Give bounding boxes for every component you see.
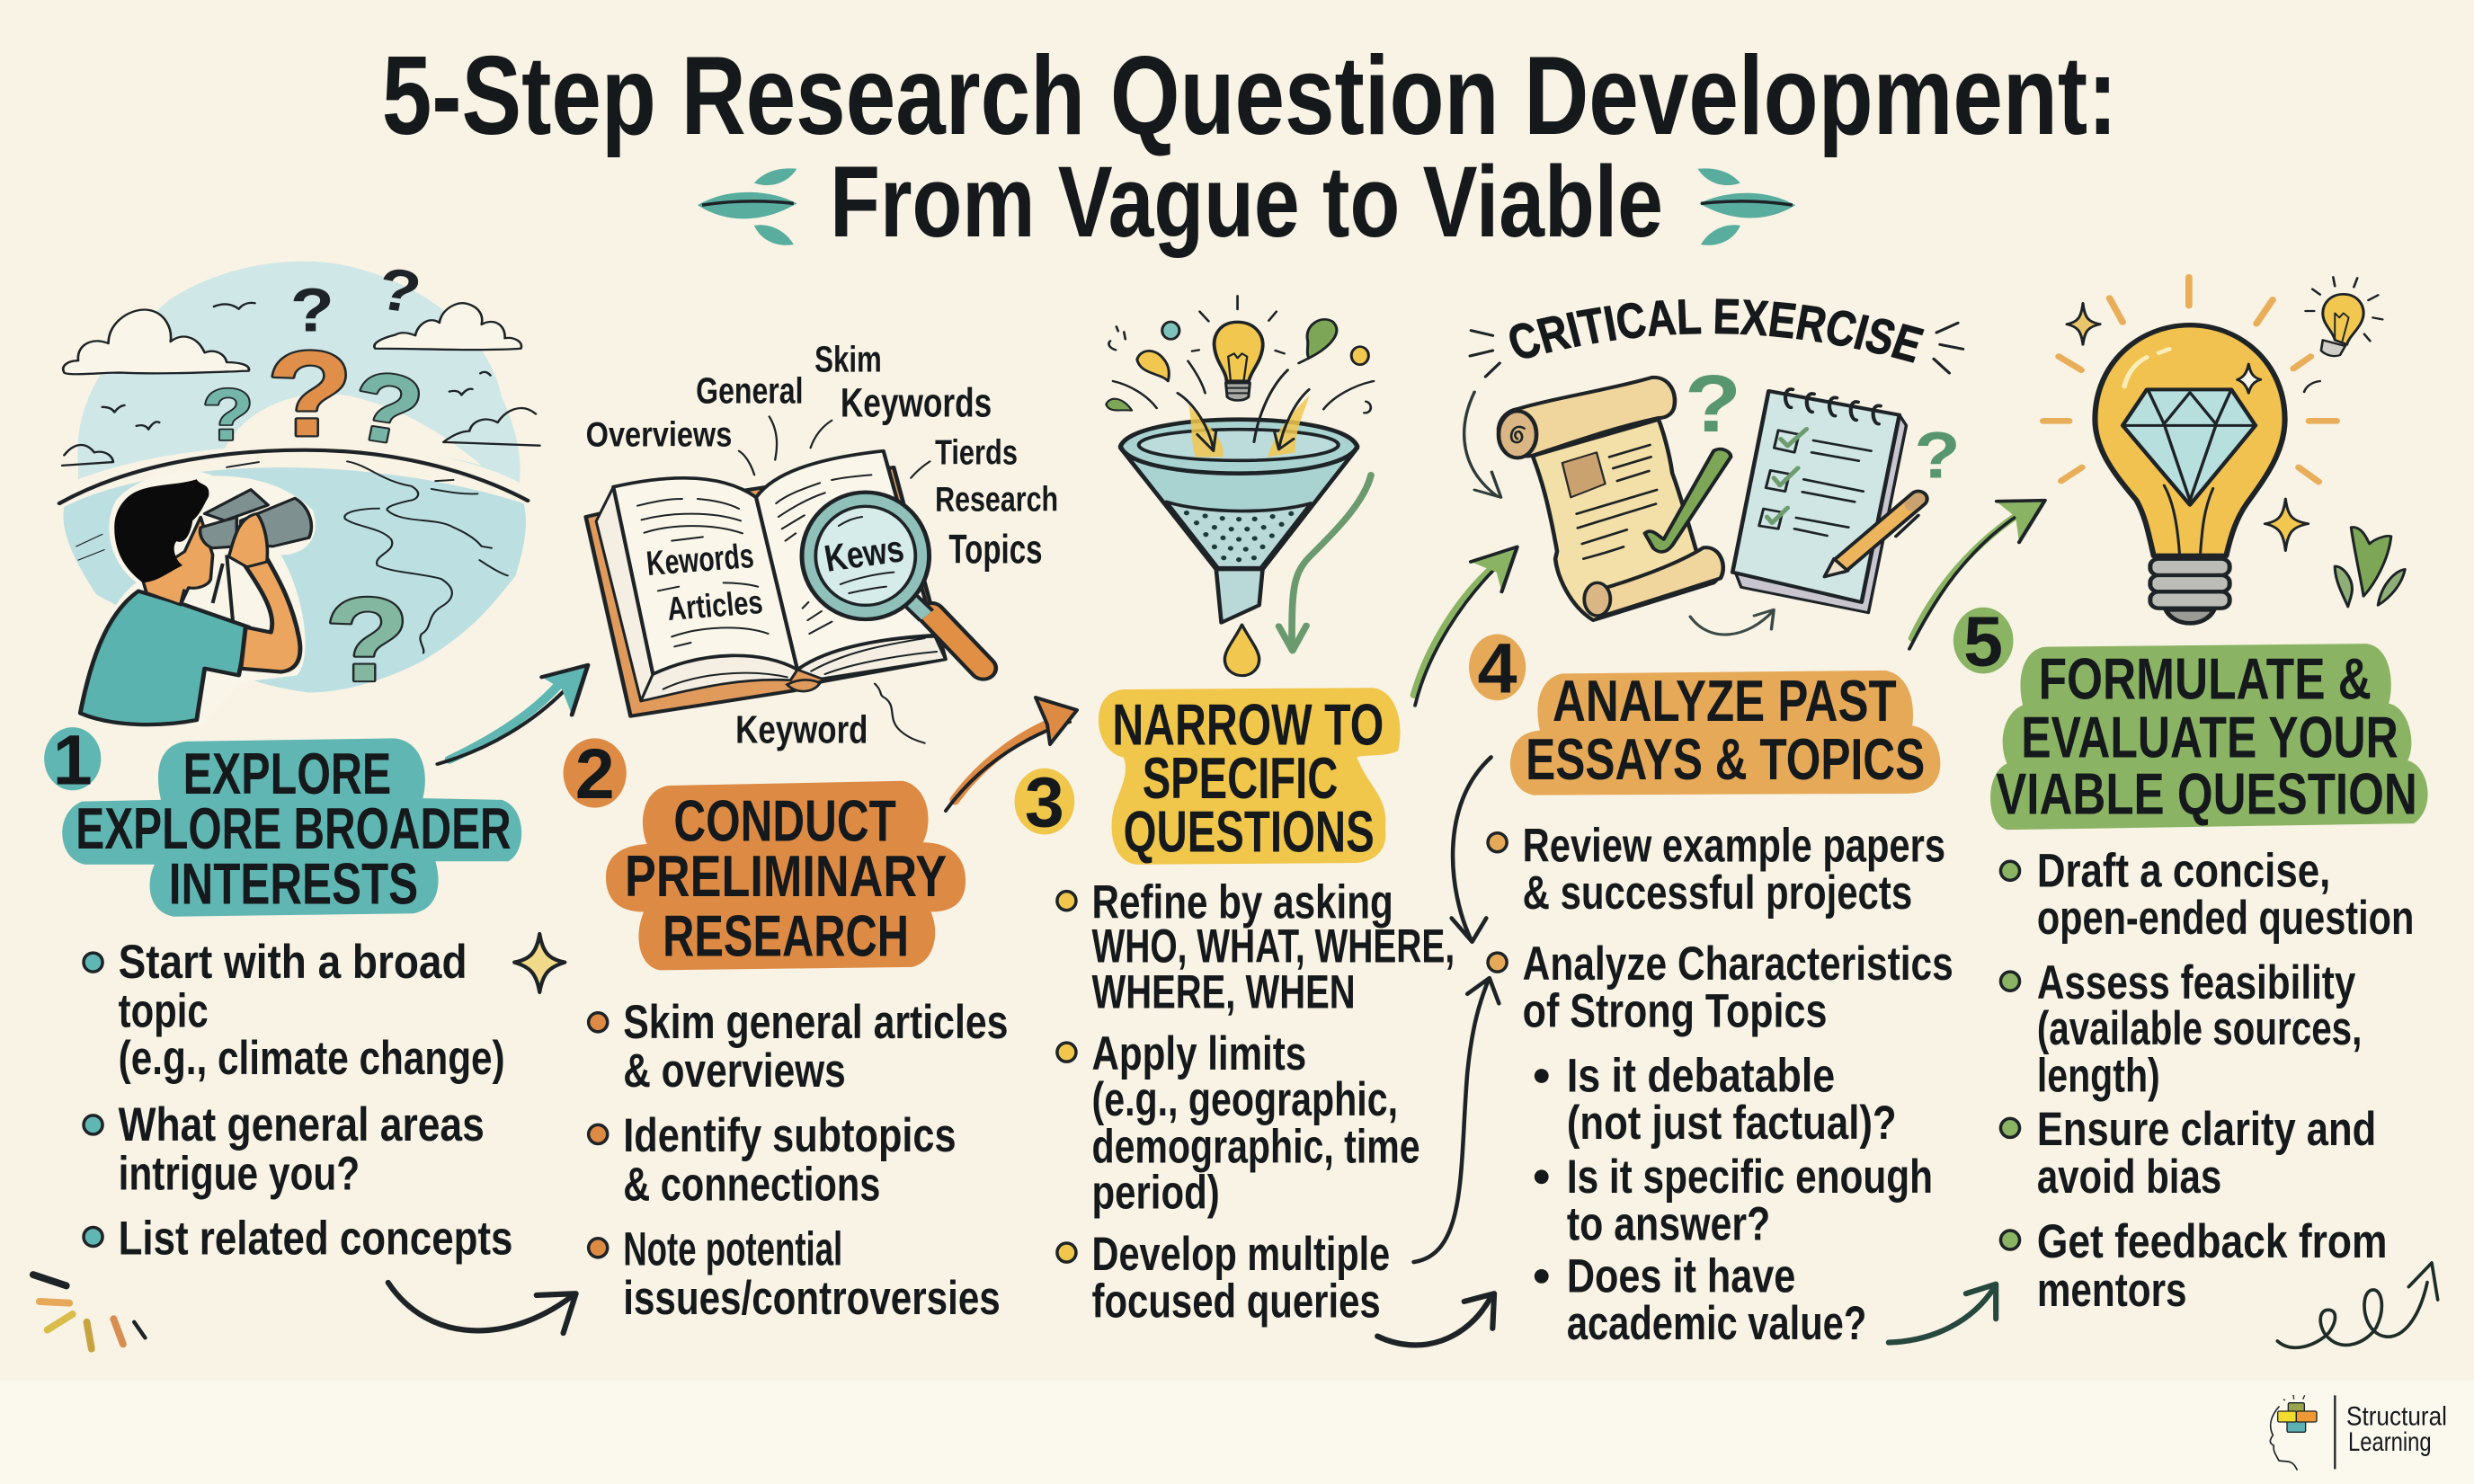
bullets: step 1: What general areas: [119, 1098, 485, 1151]
heading: conduct preliminary research: PRELIMINARY: [625, 843, 947, 909]
step number 2: [564, 734, 627, 813]
bullets: step 1: Start with a broad: [119, 936, 467, 989]
bullets: step 4: Analyze Characteristics: [1523, 937, 1953, 991]
bullets: step 5: Draft a concise,: [2037, 844, 2330, 897]
bullets: step 1: intrigue you?: [119, 1147, 360, 1200]
bullets: step 2: [589, 996, 1009, 1325]
emphasis marks: [1470, 323, 1963, 377]
bullets: step 4: to answer?: [1567, 1198, 1770, 1251]
arrow: step 4 to step 5: [1909, 501, 2045, 649]
logo text: [2346, 1401, 2447, 1457]
title: [382, 33, 2117, 258]
illustration: critical exercise with scroll and checklist: [1462, 298, 1965, 636]
bullets: step 3: period): [1092, 1166, 1220, 1219]
bullets: step 5: Assess feasibility: [2037, 956, 2355, 1009]
step number 1: [44, 720, 101, 799]
question marks: ?: [325, 573, 409, 706]
floating keyword labels: Tierds: [935, 432, 1018, 472]
bullets: step 4: Does it have: [1567, 1249, 1795, 1302]
panel: step 1 text: [44, 720, 521, 1265]
floating keyword labels: Topics: [948, 528, 1043, 573]
heading: analyze past essays and topics: [1510, 668, 1940, 795]
heading: conduct preliminary research: [606, 781, 966, 970]
bullets: step 3: [1057, 875, 1455, 1328]
sky wash: [77, 262, 521, 483]
bullets: step 3: focused queries: [1092, 1275, 1381, 1328]
arrow: step 2 to step 3: [946, 698, 1077, 811]
question marks: ?: [267, 326, 352, 461]
bullets: step 2: & connections: [623, 1159, 880, 1212]
funnel rim: [1120, 420, 1357, 474]
right page: [756, 451, 935, 670]
panel: step 5 text: [1953, 602, 2428, 1317]
page labels: [645, 537, 764, 627]
bullets: step 4: of Strong Topics: [1523, 985, 1827, 1038]
sea wash: [63, 467, 526, 692]
bulb glass: [2095, 325, 2285, 555]
head outline: [2270, 1407, 2297, 1470]
bullets: step 4: Review example papers: [1523, 819, 1945, 872]
floating keyword labels: Keywords: [841, 380, 992, 426]
arrow: develop multiple to analyze characteristics: [1414, 978, 1499, 1262]
title: From Vague to Viable: [830, 145, 1663, 258]
illustration: open book with magnifying glass and labels: [586, 339, 1058, 751]
spark lines: [1108, 296, 1374, 413]
bullets: step 5: length): [2037, 1050, 2160, 1103]
bullets: step 4: Is it debatable: [1567, 1050, 1835, 1103]
spine: [788, 680, 820, 691]
heading: analyze past essays and topics: ANALYZE PAST: [1553, 668, 1897, 733]
bullets: step 2: Identify subtopics: [623, 1109, 957, 1162]
clouds: [62, 303, 539, 466]
bullets: step 3: WHERE, WHEN: [1092, 966, 1356, 1019]
heading: analyze past essays and topics: ESSAYS & TOPICS: [1526, 726, 1925, 792]
panel: step 4 text: [1469, 628, 1953, 1350]
bullets: step 1: [84, 936, 512, 1265]
icon: sparkle: [514, 934, 565, 992]
heading: formulate and evaluate your viable question: FORMULATE &: [2039, 646, 2372, 712]
puzzle blocks: [2278, 1395, 2317, 1432]
curved arrow to notepad: [1690, 609, 1774, 635]
arrow: step 3 bullets to step 4: [1377, 1293, 1494, 1345]
question marks: ?: [371, 255, 427, 326]
page stacks: [596, 487, 653, 701]
bullets: step 3: Apply limits: [1092, 1027, 1306, 1080]
bullets: step 5: Get feedback from: [2037, 1215, 2387, 1268]
idea bulb: [1215, 322, 1263, 400]
bullets: step 5: mentors: [2037, 1264, 2187, 1317]
heading: explore broader interests: EXPLORE BROADER: [76, 795, 512, 861]
funnel body: [1120, 448, 1357, 569]
divider: [2332, 1395, 2338, 1469]
page labels: Articles: [665, 584, 764, 627]
green arrow: [1278, 475, 1371, 651]
step number 3: [1015, 763, 1074, 842]
question marks: ?: [290, 275, 334, 344]
scroll: [1499, 378, 1731, 620]
arc of pale cloud over horizon: [225, 394, 482, 466]
floating keyword labels: Skim: [814, 339, 882, 380]
small bulb: [2304, 277, 2382, 392]
bullets: step 2: & overviews: [623, 1044, 846, 1097]
bullets: step 2: Skim general articles: [623, 996, 1009, 1049]
step number 3: 3: [1025, 763, 1064, 842]
bullets: step 4: Is it specific enough: [1567, 1151, 1933, 1204]
step number 4: [1469, 628, 1526, 707]
floating keyword labels: Overviews: [586, 414, 732, 454]
panel: step 2 text: [564, 734, 1009, 1325]
strainer dots: [1184, 511, 1294, 562]
floating keyword labels: Keyword: [735, 708, 868, 751]
question marks: ?: [202, 374, 254, 456]
horizon and coastlines: [59, 450, 528, 653]
flying ideas: [1106, 319, 1368, 411]
floating keyword labels: Research: [935, 479, 1058, 519]
bullets: step 5: (available sources,: [2037, 1002, 2362, 1055]
left page: [613, 478, 797, 674]
panel: step 3 text: [1015, 688, 1455, 1328]
plant: [2335, 528, 2405, 607]
magnifying glass: Kews: [821, 527, 907, 580]
question marks: ?: [343, 351, 432, 467]
heading: narrow to specific questions: SPECIFIC: [1143, 745, 1338, 811]
page labels: Kewords: [645, 537, 755, 582]
arrow: step 4 bullets to step 5: [1889, 1284, 1996, 1343]
bullets: step 4: academic value?: [1567, 1297, 1866, 1350]
rays: [2043, 277, 2336, 482]
heading: narrow to specific questions: NARROW TO: [1112, 691, 1384, 757]
bullets: step 1: List related concepts: [119, 1212, 512, 1265]
step number 1: 1: [53, 720, 93, 799]
sparkles: [2067, 303, 2309, 551]
bullets: step 1: (e.g., climate change): [119, 1032, 505, 1085]
floating keyword labels: General: [696, 370, 804, 412]
heading: narrow to specific questions: QUESTIONS: [1124, 799, 1375, 865]
book cover: [586, 467, 946, 716]
arrow: step 1 to step 2: [438, 665, 588, 764]
bullets: step 3: Refine by asking: [1092, 875, 1393, 929]
critical exercise label: CRITICAL EXERCISE: [1509, 298, 1924, 363]
heading: formulate and evaluate your viable question: [1990, 644, 2428, 830]
arrow: heading 4 to analyze characteristics: [1452, 757, 1491, 942]
step number 5: 5: [1963, 602, 2003, 681]
illustration: funnel filtering ideas: [1106, 296, 1374, 676]
diamond: [2122, 389, 2256, 505]
bullets: step 4: & successful projects: [1523, 866, 1912, 920]
heading: narrow to specific questions: [1099, 688, 1401, 865]
bulb base: [2150, 559, 2229, 623]
floating keyword labels: [586, 339, 1058, 751]
magnifying glass: [802, 493, 983, 668]
bullets: step 3: WHO, WHAT, WHERE,: [1092, 920, 1455, 973]
logo: structural learning: [2270, 1395, 2447, 1470]
icon: left title leaves: [699, 168, 796, 245]
bullets: step 3: (e.g., geographic,: [1092, 1073, 1398, 1126]
step number 4: 4: [1478, 628, 1517, 707]
spout and drop: [1216, 569, 1262, 623]
pencil: [1824, 499, 1918, 577]
curved arrow into scroll: [1464, 392, 1501, 497]
icon: burst marks: [33, 1275, 145, 1349]
illustration: person with binoculars looking at a landscape: [59, 255, 539, 727]
heading: explore broader interests: EXPLORE: [183, 741, 391, 806]
icon: right title leaves: [1697, 168, 1795, 245]
heading: explore broader interests: [62, 738, 521, 917]
logo text: Learning: [2348, 1427, 2432, 1457]
bullets: step 3: demographic, time: [1092, 1121, 1420, 1174]
bullets: step 5: [2000, 844, 2414, 1317]
arrow: step 1 bullets to step 2: [388, 1283, 576, 1333]
birds: [102, 303, 491, 430]
question marks: ?: [1685, 358, 1741, 449]
person: [76, 471, 316, 727]
logo text: Structural: [2346, 1401, 2447, 1431]
illustration: light bulb with diamond: [2043, 277, 2405, 623]
bullets: step 5: Ensure clarity and: [2037, 1103, 2376, 1156]
bullets: step 1: topic: [119, 985, 209, 1038]
question marks: ?: [1914, 419, 1961, 492]
heading: conduct preliminary research: RESEARCH: [663, 903, 909, 969]
bullets: step 5: avoid bias: [2037, 1151, 2221, 1204]
arrow: step 3 to step 4: [1414, 547, 1517, 706]
bullets: step 2: Note potential: [623, 1223, 842, 1276]
inflow arrows: [1178, 370, 1309, 451]
step number 2: 2: [575, 734, 615, 813]
page text lines: [637, 416, 937, 743]
notepad checklist: [1732, 389, 1906, 613]
heading: conduct preliminary research: CONDUCT: [673, 787, 896, 853]
bullets: step 3: Develop multiple: [1092, 1228, 1390, 1281]
step number 5: [1953, 602, 2014, 681]
question marks: [202, 255, 432, 706]
heading: explore broader interests: INTERESTS: [169, 851, 418, 917]
icon: looping arrow: [2277, 1263, 2438, 1347]
question marks: [1685, 358, 1961, 492]
bullets: step 4: [1488, 819, 1953, 1350]
bullets: step 2: issues/controversies: [623, 1272, 1001, 1325]
bullets: step 4: (not just factual)?: [1567, 1097, 1897, 1150]
